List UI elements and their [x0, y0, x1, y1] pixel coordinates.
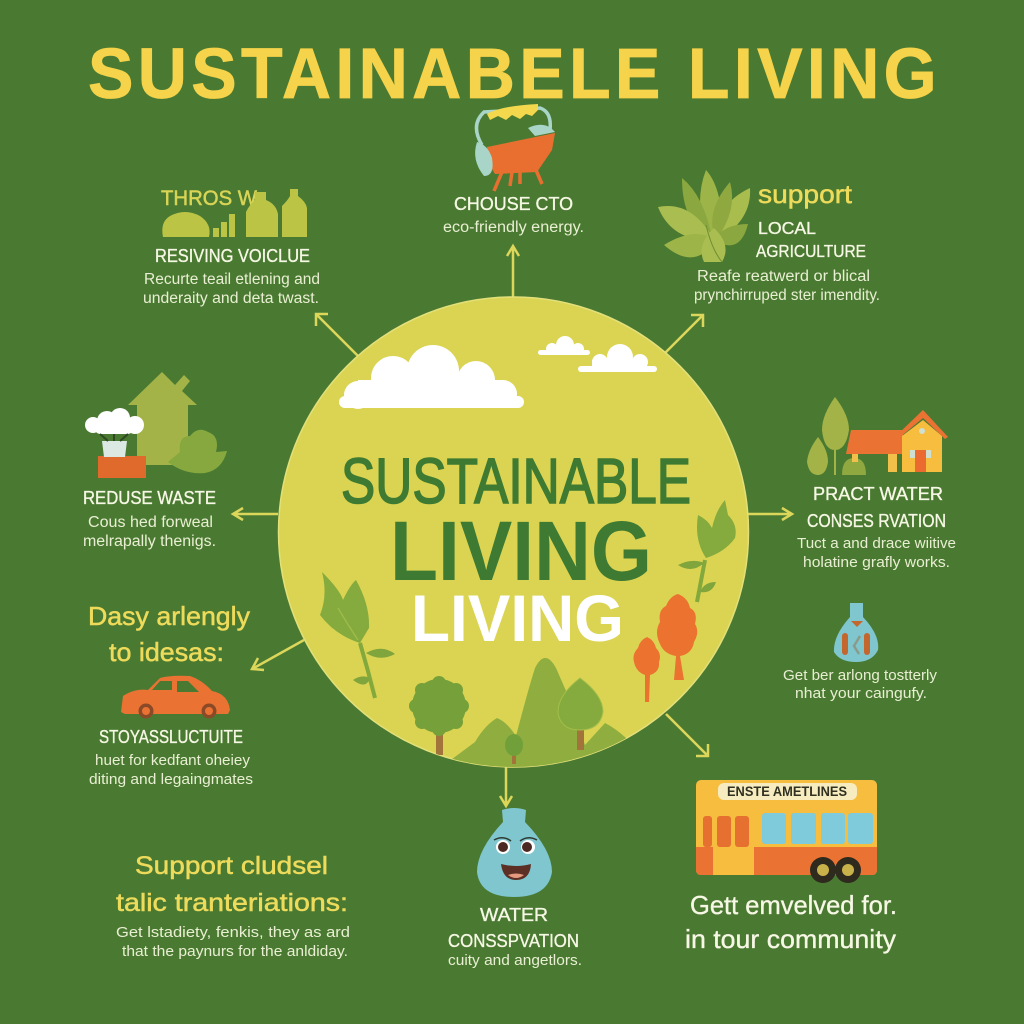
block: daily ideas heading: Dasy arlengly	[88, 601, 250, 631]
icon: left leaves	[320, 572, 395, 698]
icon: large cloud	[339, 345, 524, 409]
heading: CHOUSE CTO	[454, 193, 573, 214]
body: Cous hed forweal	[88, 514, 213, 531]
block: water conservation right	[797, 483, 956, 571]
block: get involved text	[685, 890, 897, 954]
block: get better text: nhat your caingufy.	[795, 685, 927, 702]
block: support bottom left: talic tranteriations:	[116, 889, 348, 917]
block: get better text: Get ber arlong tostterly	[783, 667, 937, 684]
body: Recurte teail etlening and	[144, 271, 320, 288]
icon: medium cloud	[578, 344, 657, 372]
heading: Support cludsel	[135, 852, 328, 880]
block: daily ideas heading: to idesas:	[109, 637, 224, 667]
icon: hills and trees	[409, 658, 626, 767]
body: Get lstadiety, fenkis, they as ard	[116, 924, 350, 941]
block: reduce waste	[83, 487, 216, 550]
title: SUSTAINABELE LIVING	[88, 34, 937, 113]
icon: tree and house	[807, 397, 948, 475]
block: get involved text: Gett emvelved for.	[690, 890, 897, 920]
body: Tuct a and drace wiitive	[797, 535, 956, 552]
block: support bottom left: that the paynurs for the anldiday.	[122, 943, 348, 960]
block: top left text	[143, 246, 320, 307]
arrows	[233, 246, 792, 806]
icon: recycling bottle	[834, 603, 878, 662]
block: top left text: underaity and deta twast.	[143, 290, 319, 307]
heading: REDUSE WASTE	[83, 487, 216, 508]
block: daily ideas heading	[88, 601, 250, 667]
heading: support	[758, 179, 853, 209]
body: huet for kedfant oheiey	[95, 752, 251, 769]
block: water conservation bottom: CONSSPVATION	[448, 931, 579, 951]
block: top right text: AGRICULTURE	[756, 241, 866, 261]
icon: orange autumn leaves	[634, 594, 697, 702]
block: reduce waste: melrapally thenigs.	[83, 533, 216, 550]
icon: small cloud	[538, 336, 590, 355]
circle heading line 2: LIVING	[390, 504, 652, 598]
body: eco-friendly energy.	[443, 219, 584, 236]
icon: containers: THROS W	[161, 187, 257, 210]
block: top center text	[443, 193, 584, 236]
block: water conservation right: holatine grafly works.	[803, 554, 950, 571]
central circle	[278, 297, 748, 780]
circle heading line 1: SUSTAINABLE	[341, 445, 691, 517]
body: Reafe reatwerd or blical	[697, 268, 870, 285]
body: cuity and angetlors.	[448, 952, 582, 969]
block: top right text: prynchirruped ster imendity.	[694, 287, 880, 304]
circle heading line 3: LIVING	[411, 581, 624, 655]
block: get better text	[783, 667, 937, 702]
block: water conservation right: CONSES RVATION	[807, 511, 946, 531]
block: stay text	[89, 727, 253, 788]
heading: WATER	[480, 904, 548, 925]
block: get involved text: in tour community	[685, 924, 896, 954]
subheading: LOCAL	[758, 218, 816, 238]
heading: PRACT WATER	[813, 483, 943, 504]
block: support bottom left	[116, 852, 350, 960]
icon: containers	[161, 187, 307, 237]
icon: leaf cluster	[658, 170, 750, 262]
heading: RESIVING VOICLUE	[155, 246, 310, 266]
icon: bus	[696, 780, 877, 883]
icon: energy grill	[475, 104, 555, 191]
icon: house and plants	[85, 372, 227, 478]
block: water conservation bottom	[448, 904, 582, 969]
icon: car	[121, 676, 230, 718]
icon: right sprig	[678, 500, 736, 602]
icon: water drop character	[477, 808, 552, 897]
heading: STOYASSLUCTUITE	[99, 727, 243, 747]
block: stay text: diting and legaingmates	[89, 771, 253, 788]
block: top right text	[694, 179, 880, 304]
icon: bus: ENSTE AMETLINES	[727, 783, 847, 799]
